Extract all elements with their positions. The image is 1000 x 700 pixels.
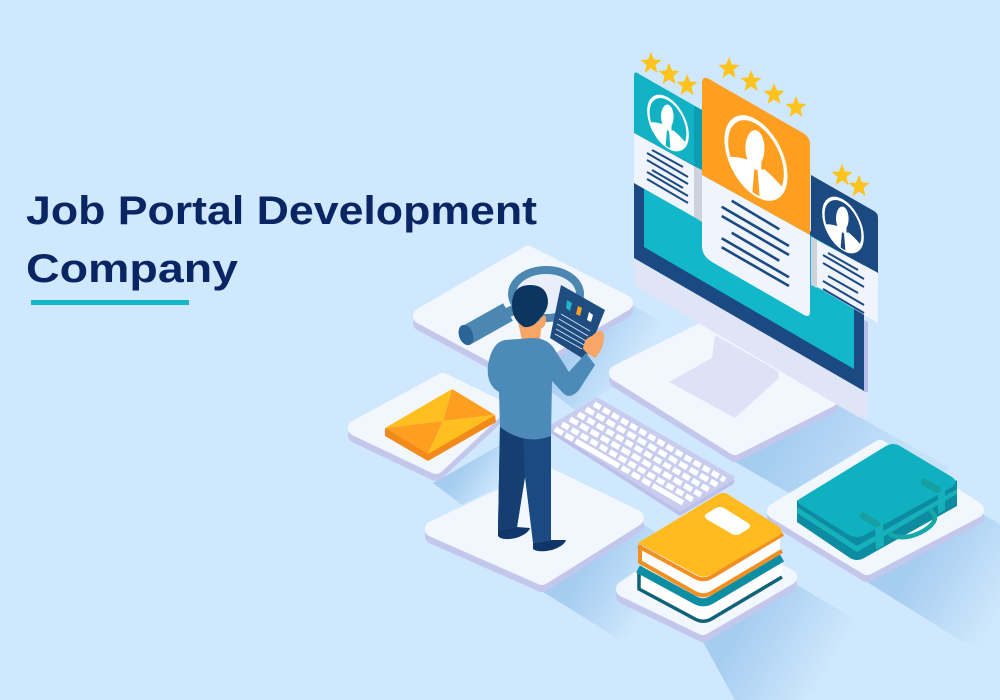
document — [550, 285, 605, 360]
icon: magnifier — [456, 270, 580, 347]
platform: figure — [433, 475, 636, 584]
card: center candidate — [702, 78, 810, 316]
icon: briefcase — [797, 444, 957, 560]
resume lines — [722, 201, 789, 286]
avatar — [647, 87, 689, 161]
resume lines — [647, 150, 688, 203]
avatar — [724, 103, 788, 215]
floor shadows — [433, 305, 1000, 700]
platform: books — [624, 534, 789, 634]
keyboard — [552, 400, 732, 513]
monitor — [634, 130, 868, 417]
platform: briefcase — [775, 448, 976, 574]
title underline — [31, 300, 189, 305]
card: right candidate — [811, 175, 878, 323]
torso and arm — [488, 338, 595, 439]
platform: magnifier — [421, 254, 625, 374]
title: Job Portal Development — [26, 189, 537, 233]
platform: monitor — [617, 323, 830, 454]
monitor stand — [669, 335, 779, 418]
person — [488, 285, 605, 551]
resume lines — [823, 253, 864, 313]
icon: books — [638, 493, 783, 621]
trousers — [498, 425, 551, 543]
hand — [583, 331, 604, 358]
platform: envelope — [356, 381, 498, 473]
avatar — [822, 189, 864, 263]
neck and ear — [518, 315, 546, 340]
shoes — [498, 527, 566, 551]
card: left candidate — [634, 72, 702, 222]
icon: envelope — [385, 389, 496, 461]
head — [512, 285, 548, 327]
title — [26, 189, 537, 291]
title: Company — [26, 247, 239, 291]
rating stars — [640, 52, 870, 196]
